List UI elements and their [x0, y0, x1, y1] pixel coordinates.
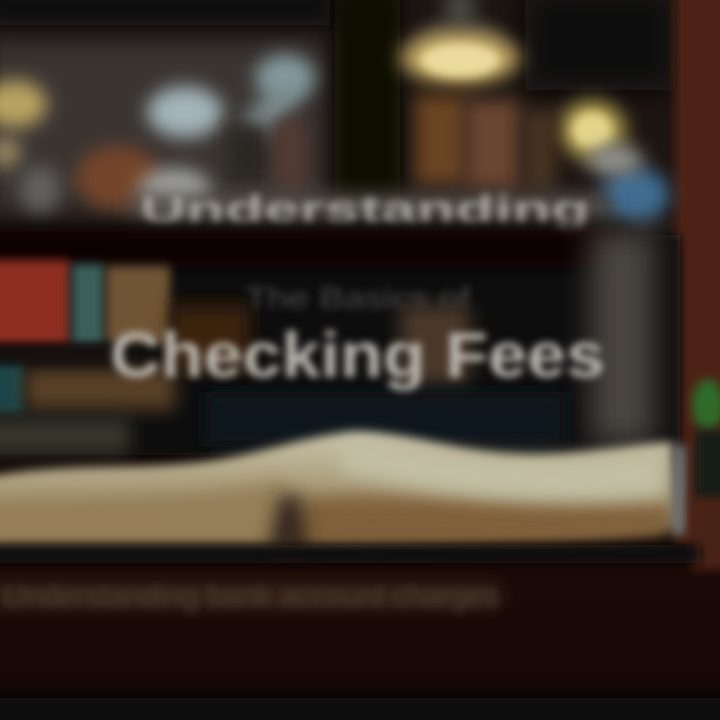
caption: Understanding bank account charges [4, 580, 499, 613]
open book [0, 432, 686, 552]
central browns [205, 230, 655, 447]
icon: plant [690, 379, 720, 570]
shelf [0, 228, 630, 268]
icon: hanging lamps [0, 0, 626, 168]
bottom shade [0, 698, 720, 720]
subheading: The Basics of [245, 282, 471, 315]
top text band: Understanding [140, 189, 590, 231]
books left [0, 260, 250, 454]
shelf objects [20, 54, 669, 223]
top text band [130, 189, 610, 231]
main title: Checking Fees [110, 319, 605, 391]
table surface [0, 545, 720, 720]
table edge shadow [0, 545, 700, 563]
